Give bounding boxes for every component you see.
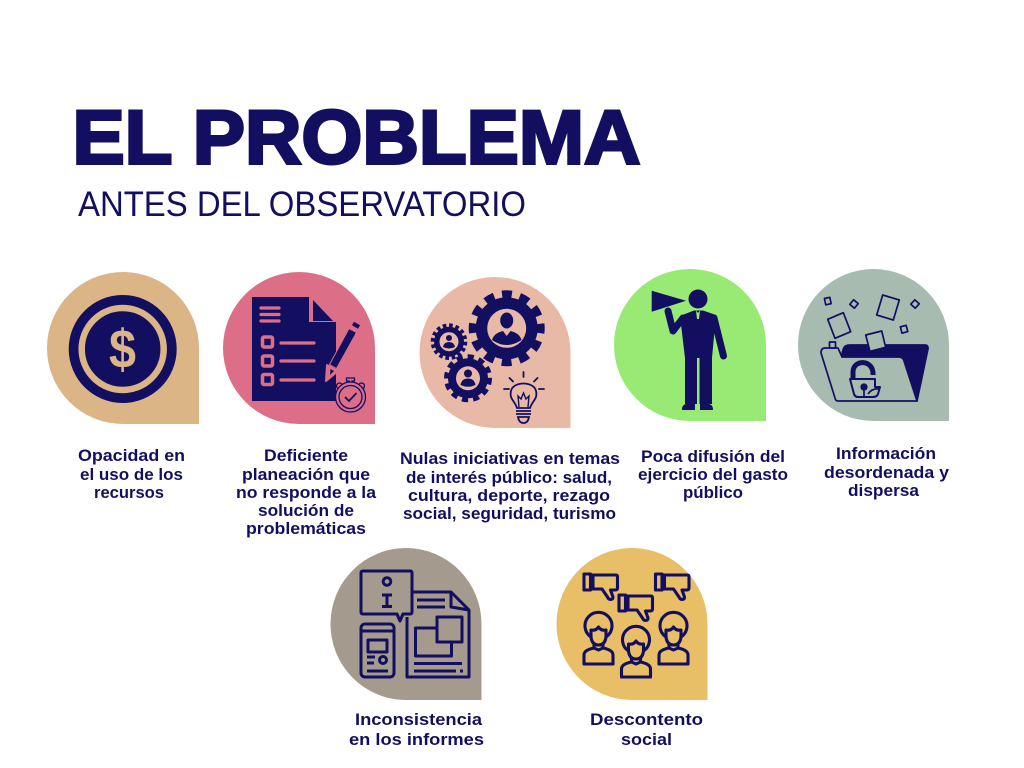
icon: pencil <box>326 324 359 381</box>
label: planeacion: planeación que <box>242 465 370 484</box>
label: iniciativas: Nulas iniciativas en temas <box>400 449 620 468</box>
panel: iniciativas <box>400 277 620 523</box>
subtitle: ANTES DEL OBSERVATORIO <box>78 185 526 224</box>
label: informes <box>349 710 484 749</box>
panel: difusion <box>614 269 788 502</box>
panel: opacidad <box>47 272 199 502</box>
label: planeacion <box>236 446 377 538</box>
icon: light bulb <box>504 372 544 423</box>
label: iniciativas: social, seguridad, turismo <box>403 504 616 523</box>
label: difusion: ejercicio del gasto <box>638 465 788 484</box>
label: informes: Inconsistencia <box>355 710 483 729</box>
label: descontento: social <box>621 730 672 749</box>
label: iniciativas <box>400 449 620 523</box>
icon: small gear <box>433 325 465 358</box>
icon: checklist document <box>252 297 366 412</box>
drop shape: opacidad <box>47 272 199 424</box>
label: informes: en los informes <box>349 730 484 749</box>
drop shape: informacion <box>798 269 949 421</box>
drop shape: informes <box>330 548 482 700</box>
drop shape: iniciativas <box>420 277 570 428</box>
label: descontento <box>590 710 703 749</box>
label: informacion: Información <box>836 444 936 463</box>
label: difusion: público <box>683 483 743 502</box>
label: iniciativas: cultura, deporte, rezago <box>408 486 610 505</box>
drop shape: difusion <box>614 269 766 421</box>
label: opacidad <box>78 446 185 502</box>
label: iniciativas: de interés público: salud, <box>406 468 612 487</box>
icon: man with megaphone <box>652 290 724 410</box>
icon: medium gear <box>446 357 490 400</box>
drop shape: descontento <box>556 548 708 700</box>
icon: dollar coin: $ <box>109 318 136 380</box>
label: informacion <box>824 444 950 500</box>
label: difusion: Poca difusión del <box>641 447 785 466</box>
label: planeacion: no responde a la <box>236 483 377 502</box>
label: planeacion: problemáticas <box>246 519 366 538</box>
label: opacidad: recursos <box>94 483 164 502</box>
panel: informes <box>330 548 484 749</box>
icon: folder with scattered papers <box>821 295 928 401</box>
icon: dollar coin <box>69 295 177 403</box>
icon: large gear <box>473 294 541 362</box>
label: descontento: Descontento <box>590 710 703 729</box>
label: difusion <box>638 447 788 502</box>
panel: descontento <box>556 548 708 749</box>
label: opacidad: el uso de los <box>80 465 183 484</box>
icon: stopwatch <box>336 378 366 412</box>
icon: thumbs down and people <box>584 574 689 677</box>
title: EL PROBLEMA <box>72 96 640 180</box>
label: planeacion: solución de <box>258 501 354 520</box>
label: planeacion: Deficiente <box>264 446 348 465</box>
label: informacion: dispersa <box>848 481 920 500</box>
label: informacion: desordenada y <box>824 463 950 482</box>
panel: planeacion <box>223 272 377 538</box>
panel: informacion <box>798 269 950 500</box>
icon: info bubble, phone and report <box>361 571 469 677</box>
label: opacidad: Opacidad en <box>78 446 185 465</box>
drop shape: planeacion <box>223 272 375 424</box>
